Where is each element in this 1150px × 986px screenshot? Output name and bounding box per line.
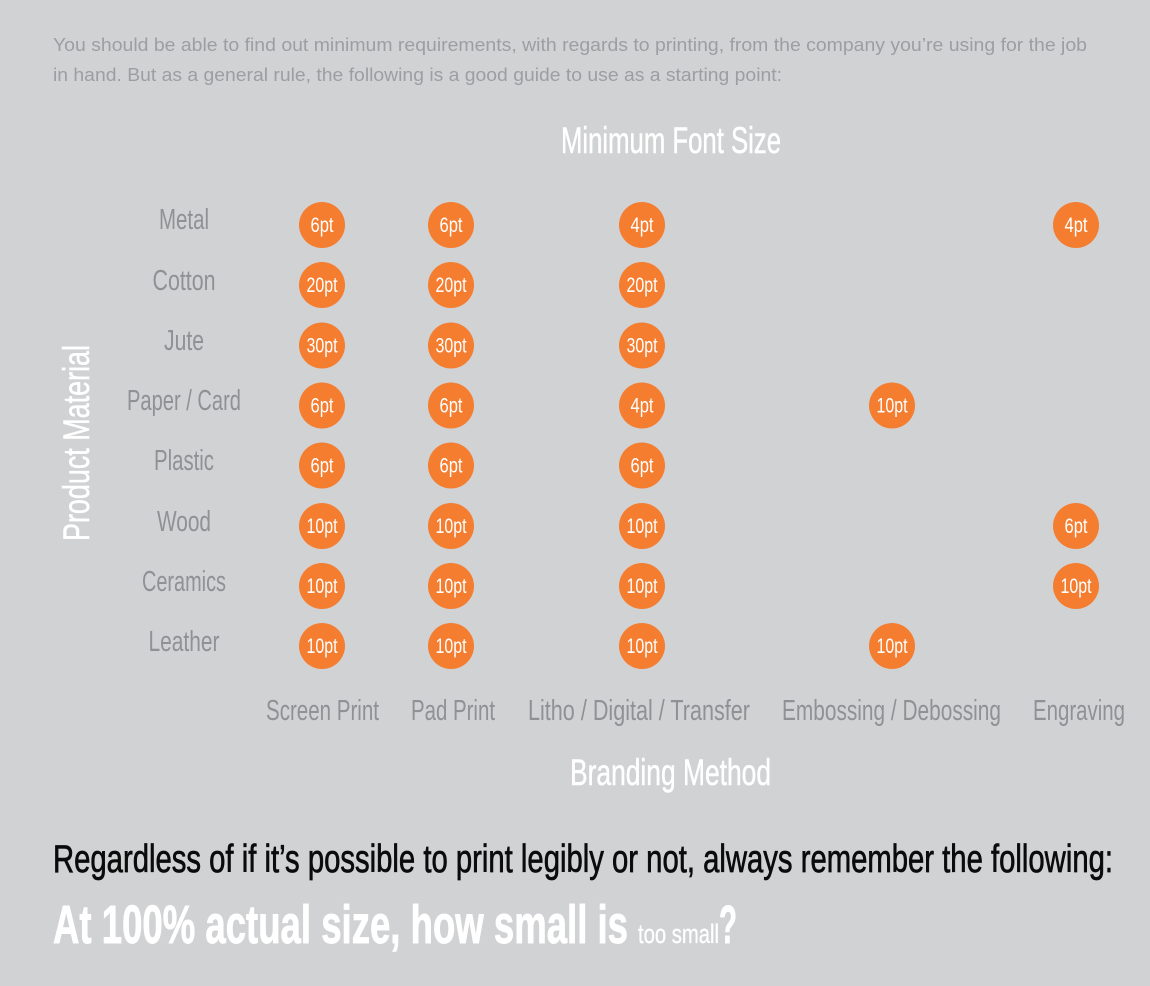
row labels: materials [127,204,241,658]
row: metal: 6pt [310,214,334,237]
row: paper / card [299,382,915,428]
row labels: materials: Paper / Card [127,385,241,417]
row labels: materials: Metal [159,204,209,236]
row: leather: 10pt [626,635,658,658]
row: jute: 30pt [306,334,338,358]
row: metal [299,202,1099,248]
row: jute: 30pt [626,334,658,358]
row labels: materials: Leather [148,626,220,658]
row: wood: 10pt [436,515,467,538]
row: wood: 10pt [626,515,658,538]
row: ceramics: 10pt [1060,575,1092,598]
row: leather: 10pt [306,635,338,658]
column labels: branding methods [266,695,1125,727]
row labels: materials: Wood [157,506,211,538]
column labels: branding methods: Embossing / Debossing [782,695,1001,727]
row: ceramics [299,563,1099,609]
chart: font size dots [299,202,1099,669]
intro text [53,34,1087,85]
row: leather: 10pt [876,635,908,658]
row labels: materials: Plastic [154,445,214,477]
row: paper / card: 6pt [440,394,463,418]
row: jute: 30pt [436,334,467,358]
axis title: product material: Product Material [56,345,97,541]
row: ceramics: 10pt [626,575,658,598]
axis title: branding method: Branding Method [570,752,771,793]
row: wood: 10pt [306,515,338,538]
column labels: branding methods: Litho / Digital / Transfer [528,695,750,727]
row: plastic: 6pt [310,454,334,478]
row: cotton [299,262,665,308]
closing question: ? [719,895,737,955]
intro text: in hand. But as a general rule, the following is a good guide to use as a starting point: [53,64,782,85]
intro text: You should be able to find out minimum requirements, with regards to printing, from the company you’re using for the job [53,34,1087,55]
row: paper / card: 6pt [310,394,334,418]
row labels: materials: Cotton [152,265,216,297]
heading: minimum font size: Minimum Font Size [561,120,781,161]
row: wood: 6pt [1064,515,1088,538]
row: cotton: 20pt [436,274,467,297]
row: metal: 6pt [440,214,463,237]
row: leather [299,623,915,669]
row: metal: 4pt [630,214,654,237]
row: paper / card: 4pt [630,394,654,418]
closing question: too small [638,919,719,949]
closing question: At 100% actual size, how small is [53,895,628,955]
row: plastic: 6pt [630,454,654,478]
row: plastic: 6pt [440,454,463,478]
row: cotton: 20pt [306,274,338,297]
column labels: branding methods: Pad Print [411,695,495,727]
row: wood [299,503,1099,549]
row: jute [299,322,665,368]
row: cotton: 20pt [626,274,658,297]
row: leather: 10pt [436,635,467,658]
row: metal: 4pt [1064,214,1088,237]
row: ceramics: 10pt [306,575,338,598]
row: plastic [299,442,665,488]
row labels: materials: Ceramics [142,566,226,598]
row labels: materials: Jute [164,325,204,357]
column labels: branding methods: Screen Print [266,695,379,727]
row: paper / card: 10pt [876,394,908,418]
row: ceramics: 10pt [436,575,467,598]
